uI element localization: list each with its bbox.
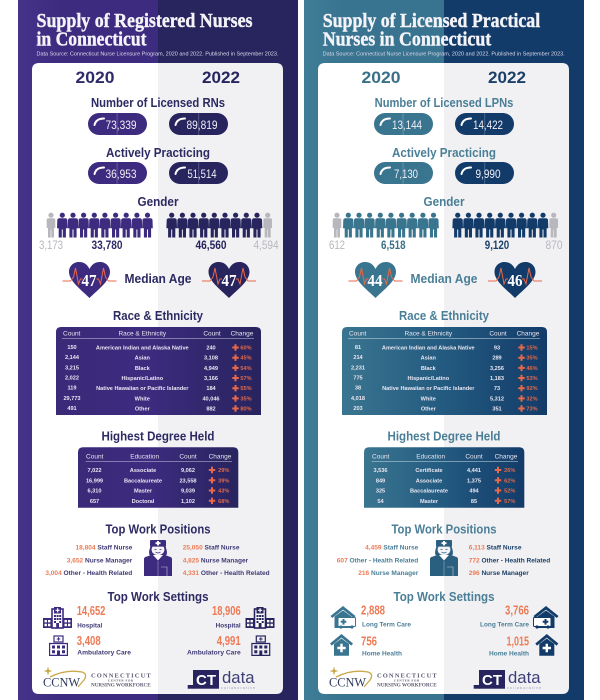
logo: CT data: collaborative: [507, 686, 541, 690]
table header: [86, 453, 232, 462]
table header: [348, 331, 540, 339]
table header: Count: [349, 331, 367, 338]
icon: long term care 2020: [330, 606, 356, 629]
logo: CT data: collaborative: [221, 686, 255, 690]
rows: 57%: [240, 376, 252, 382]
icon: heart median age 2022: [202, 262, 256, 298]
data source note: Data Source: Connecticut Nurse Licensure Program, 2020 and 2022. Published in September 2023.: [323, 52, 565, 58]
heading: top work settings: Top Work Settings: [108, 589, 208, 604]
year heading 2020: 2020: [76, 68, 114, 87]
setting: hospital 2020: Hospital: [77, 622, 103, 629]
heading: actively practicing: Actively Practicing: [106, 145, 210, 160]
pill: 2022 practicing: [455, 162, 514, 184]
table: race and ethnicity: [56, 327, 261, 415]
heading: race and ethnicity: Race & Ethnicity: [113, 308, 204, 323]
heading: race and ethnicity: Race & Ethnicity: [399, 308, 490, 323]
positions 2020: 216 Nurse Manager: [358, 570, 419, 577]
logo: CCNW: CCNW: [43, 675, 81, 690]
rows: 184: [206, 386, 217, 392]
pill: 2020 practicing: 7,130: [394, 167, 418, 181]
rows: 240: [206, 346, 216, 352]
rows: 40,046: [202, 396, 220, 402]
icon: heart median age 2020: [62, 262, 116, 298]
heading: gender: Gender: [424, 194, 464, 209]
logo: CCNW: CONNECTICUT: [377, 673, 437, 680]
rows: 29%: [218, 468, 229, 474]
icon: ambulatory 2020: [50, 636, 67, 656]
rows: Other: [421, 406, 437, 412]
rows: 2,022: [65, 376, 79, 382]
gender counts: [39, 238, 279, 252]
rows: White: [135, 396, 150, 402]
icons: gender people 2022: [452, 213, 558, 238]
rows: 85: [471, 499, 477, 505]
positions 2020: [337, 545, 419, 577]
rows: 119: [67, 386, 77, 392]
icon: heart median age 2020: 47: [82, 271, 97, 290]
gender counts: 33,780: [92, 238, 123, 252]
table header: Count: [179, 453, 197, 460]
rows: 203: [353, 406, 363, 412]
year heading 2022: 2022: [488, 68, 526, 87]
icon: nurse: [430, 540, 458, 576]
icon: ambulatory 2022: [252, 636, 270, 656]
positions 2022: 4,825 Nurse Manager: [183, 557, 249, 564]
setting: long term care 2020: 2,888: [361, 603, 385, 617]
positions 2022: 772 Other - Health Related: [469, 557, 550, 564]
rows: 4,018: [351, 396, 365, 402]
setting: long term care 2022: [480, 603, 529, 629]
rows: 849: [376, 478, 385, 484]
rows: 60%: [240, 346, 252, 352]
rows: [374, 467, 515, 505]
table header: Count: [203, 331, 221, 338]
rows: Doctoral: [132, 499, 155, 505]
logo: CT data: [474, 668, 541, 690]
positions 2022: 296 Nurse Manager: [469, 570, 529, 577]
positions 2022: [469, 545, 550, 577]
rows: Other: [135, 406, 151, 412]
rows: Asian: [421, 356, 436, 362]
rows: 29,773: [63, 396, 81, 402]
rows: Master: [134, 488, 153, 494]
rows: 16,999: [86, 478, 103, 484]
rows: 9,062: [181, 468, 195, 474]
rows: Native Hawaiian or Pacific Islander: [96, 386, 189, 392]
rows: Black: [135, 366, 151, 372]
icon: heart median age 2020: [348, 262, 402, 298]
data source note: Data Source: Connecticut Nurse Licensure Program, 2020 and 2022. Published in September 2023.: [36, 52, 278, 58]
rows: 882: [206, 406, 216, 412]
title: LPN: [323, 10, 541, 50]
rows: 35%: [240, 396, 252, 402]
table header: [372, 453, 518, 462]
logo: CT data: [188, 668, 255, 690]
logo: CCNW: CENTER FOR: [108, 679, 134, 683]
icon: heart median age 2020: 44: [368, 271, 383, 290]
heading: gender: Gender: [138, 194, 178, 209]
logo: CCNW: CONNECTICUT: [91, 673, 151, 680]
positions 2022: 4,331 Other - Health Related: [183, 570, 270, 577]
pill: 2022 practicing: [169, 162, 228, 184]
icon: heart median age 2022: 47: [222, 271, 237, 290]
rows: 32%: [526, 396, 538, 402]
setting: hospital 2022: Hospital: [216, 622, 241, 629]
pill: 2022 licensed: [455, 113, 514, 135]
pill: 2020 practicing: [374, 162, 433, 184]
table header: [62, 331, 254, 339]
pill: 2020 licensed: 73,339: [106, 118, 137, 132]
rows: 15%: [526, 346, 538, 352]
rows: 38: [355, 386, 361, 392]
rows: 92%: [526, 386, 538, 392]
gender counts: 3,173: [39, 238, 63, 252]
positions 2020: 3,004 Other - Health Related: [45, 570, 132, 577]
pill: 2022 licensed: 89,819: [186, 118, 218, 132]
rows: 491: [67, 406, 77, 412]
rows: American Indian and Alaska Native: [382, 346, 475, 352]
heading: number licensed: Number of Licensed RNs: [91, 95, 225, 110]
setting: ambulatory 2020: Ambulatory Care: [77, 650, 132, 657]
title: RN: Supply of Registered Nurses: [36, 10, 253, 32]
icon: nurse: [144, 540, 172, 576]
rows: 214: [353, 355, 364, 361]
table header: Change: [517, 331, 540, 338]
pill: 2022 licensed: 14,422: [473, 118, 503, 132]
rows: 35%: [526, 356, 538, 362]
icon: hospital 2022: [246, 607, 274, 628]
setting: home health 2022: Home Health: [489, 650, 529, 657]
logo: CT data: data: [222, 668, 255, 687]
logo: CT data: data: [508, 668, 541, 687]
rows: 1,183: [490, 376, 504, 382]
rows: 3,215: [65, 365, 79, 371]
setting: hospital 2020: [77, 604, 105, 629]
rows: 46%: [526, 366, 538, 372]
logo: CT data: CT: [196, 672, 216, 689]
table: race and ethnicity: [342, 327, 547, 415]
setting: long term care 2022: Long Term Care: [480, 622, 529, 629]
rows: 150: [67, 345, 77, 351]
rows: 2,144: [65, 355, 80, 361]
year heading 2020: 2020: [362, 68, 400, 87]
rows: 26%: [504, 468, 515, 474]
rows: White: [421, 396, 436, 402]
white card: [318, 63, 569, 694]
positions 2022: 25,050 Staff Nurse: [183, 545, 240, 552]
rows: 3,536: [374, 468, 388, 474]
table header: Change: [231, 331, 254, 338]
rows: 80%: [240, 406, 252, 412]
pill: 2022 licensed: [169, 113, 228, 135]
rows: 93: [494, 346, 500, 352]
gender counts: 870: [546, 238, 563, 252]
icon: heart median age 2022: 46: [508, 271, 522, 290]
rows: 57%: [504, 499, 515, 505]
rows: 3,166: [204, 376, 218, 382]
rows: 1,375: [467, 478, 481, 484]
rows: 4,441: [467, 468, 481, 474]
setting: ambulatory 2022: [187, 634, 241, 657]
rows: American Indian and Alaska Native: [96, 346, 189, 352]
positions 2022: [183, 545, 270, 577]
heading: top work settings: Top Work Settings: [394, 589, 494, 604]
rows: Hispanic/Latino: [407, 376, 450, 382]
setting: long term care 2020: Long Term Care: [362, 622, 411, 629]
panel background: LPN: [304, 0, 584, 700]
positions 2020: [45, 545, 133, 577]
table: highest degree: [78, 447, 238, 508]
rows: 54%: [240, 366, 252, 372]
gender counts: 612: [329, 238, 345, 252]
panel: licensed practical nurses: [304, 0, 584, 700]
table header: Count: [86, 453, 104, 460]
positions 2020: 4,459 Staff Nurse: [365, 545, 419, 552]
icon: home health 2020: [330, 634, 353, 656]
icon: home health 2022: [535, 634, 558, 656]
positions 2020: 18,804 Staff Nurse: [76, 545, 133, 552]
setting: home health 2020: Home Health: [362, 650, 402, 657]
setting: home health 2022: [489, 634, 529, 657]
heading: median age: Median Age: [410, 271, 478, 286]
rows: Native Hawaiian or Pacific Islander: [382, 386, 475, 392]
heading: highest degree: Highest Degree Held: [102, 428, 215, 444]
positions 2020: 607 Other - Health Related: [337, 557, 418, 564]
rows: Baccalaureate: [124, 478, 162, 484]
pill: 2022 practicing: 9,990: [476, 167, 501, 181]
rows: 73%: [526, 406, 538, 412]
heading: top work positions: Top Work Positions: [106, 521, 210, 536]
pill: 2020 practicing: 36,953: [106, 167, 137, 181]
rows: [351, 344, 538, 412]
table header: Race & Ethnicity: [118, 331, 167, 338]
setting: home health 2020: 756: [361, 634, 377, 648]
icons: gender people 2020: [333, 213, 439, 238]
rows: 68%: [218, 499, 229, 505]
rows: [86, 467, 229, 505]
pill: 2020 licensed: [374, 113, 433, 135]
pill: 2020 licensed: 13,144: [392, 118, 422, 132]
logo: CCNW: CENTER FOR: [394, 679, 420, 683]
heading: number licensed: Number of Licensed LPNs: [375, 95, 513, 110]
rows: 2,231: [351, 365, 365, 371]
positions 2022: 6,113 Staff Nurse: [469, 545, 522, 552]
setting: ambulatory 2022: Ambulatory Care: [187, 650, 241, 657]
title: LPN: Nurses in Connecticut: [323, 28, 491, 50]
setting: ambulatory 2020: 3,408: [77, 634, 101, 648]
table header: Count: [465, 453, 483, 460]
logo: CCNW: NURSING WORKFORCE: [91, 683, 151, 689]
logo: CCNW: [329, 666, 437, 690]
setting: long term care 2022: 3,766: [505, 603, 529, 617]
logo: CT data: CT: [482, 672, 502, 689]
rows: 7,022: [88, 468, 102, 474]
year heading 2022: 2022: [202, 68, 240, 87]
setting: home health 2022: 1,015: [506, 634, 529, 648]
rows: 494: [469, 488, 480, 494]
rows: 52%: [504, 488, 515, 494]
heading: top work positions: Top Work Positions: [392, 521, 496, 536]
rows: 325: [376, 488, 385, 494]
rows: 62%: [504, 478, 515, 484]
setting: ambulatory 2020: [77, 634, 132, 657]
setting: hospital 2022: [212, 604, 241, 629]
logo: CCNW: CCNW: [329, 675, 367, 690]
rows: 351: [492, 406, 502, 412]
rows: Associate: [416, 478, 442, 484]
panel background: RN: [18, 0, 298, 700]
rows: 39%: [218, 478, 229, 484]
table: highest degree: [364, 447, 524, 508]
table header: Count: [372, 453, 390, 460]
rows: 55%: [240, 386, 252, 392]
table header: Race & Ethnicity: [404, 331, 453, 338]
panel: registered nurses: [18, 0, 298, 700]
rows: Associate: [130, 468, 156, 474]
heading: median age: Median Age: [124, 271, 192, 286]
pill: 2020 licensed: [88, 113, 147, 135]
icon: hospital 2020: [43, 607, 72, 628]
rows: 6,310: [88, 488, 102, 494]
rows: 3,108: [204, 356, 218, 362]
setting: home health 2020: [361, 634, 402, 657]
white card: [32, 63, 283, 694]
table header: Education: [130, 453, 160, 460]
rows: Asian: [135, 356, 150, 362]
icon: long term care 2022: [534, 606, 558, 629]
rows: 1,102: [181, 499, 195, 505]
rows: 289: [492, 356, 502, 362]
setting: long term care 2020: [361, 603, 411, 629]
rows: 775: [353, 376, 363, 382]
heading: actively practicing: Actively Practicing: [392, 145, 496, 160]
title: LPN: Supply of Licensed Practical: [323, 10, 541, 32]
logo: CCNW: NURSING WORKFORCE: [377, 683, 437, 689]
rows: 53%: [526, 376, 538, 382]
gender counts: 46,560: [196, 238, 227, 252]
setting: hospital 2022: 18,906: [212, 604, 241, 618]
rows: 3,256: [490, 366, 504, 372]
title: RN: in Connecticut: [36, 28, 147, 50]
rows: Master: [420, 499, 439, 505]
pill: 2020 practicing: [88, 162, 147, 184]
rows: 43%: [218, 488, 229, 494]
rows: 5,312: [490, 396, 504, 402]
table header: Education: [416, 453, 446, 460]
rows: [63, 344, 252, 412]
logo: CCNW: [43, 666, 151, 690]
icon: heart median age 2022: [488, 262, 542, 298]
rows: Hispanic/Latino: [121, 376, 164, 382]
table header: Count: [63, 331, 81, 338]
gender counts: [329, 238, 563, 252]
rows: 81: [355, 345, 361, 351]
gender counts: 4,594: [254, 238, 279, 252]
table header: Count: [489, 331, 507, 338]
setting: hospital 2020: 14,652: [77, 604, 105, 618]
rows: 73: [494, 386, 500, 392]
rows: Black: [421, 366, 437, 372]
icons: gender people 2020: [47, 213, 153, 238]
table header: Change: [209, 453, 232, 460]
setting: ambulatory 2022: 4,991: [217, 634, 241, 648]
pill: 2022 practicing: 51,514: [188, 167, 217, 181]
table header: Change: [495, 453, 518, 460]
rows: Certificate: [415, 468, 443, 474]
rows: 9,039: [181, 488, 195, 494]
heading: highest degree: Highest Degree Held: [388, 428, 501, 444]
rows: 23,558: [179, 478, 197, 484]
title: RN: [36, 10, 253, 50]
rows: Baccalaureate: [410, 488, 448, 494]
rows: 4,949: [204, 366, 218, 372]
rows: 45%: [240, 356, 252, 362]
gender counts: 9,120: [485, 238, 510, 252]
rows: 54: [377, 499, 384, 505]
gender counts: 6,518: [381, 238, 406, 252]
icons: gender people 2022: [166, 213, 272, 238]
positions 2020: 3,652 Nurse Manager: [67, 557, 133, 564]
rows: 657: [90, 499, 99, 505]
